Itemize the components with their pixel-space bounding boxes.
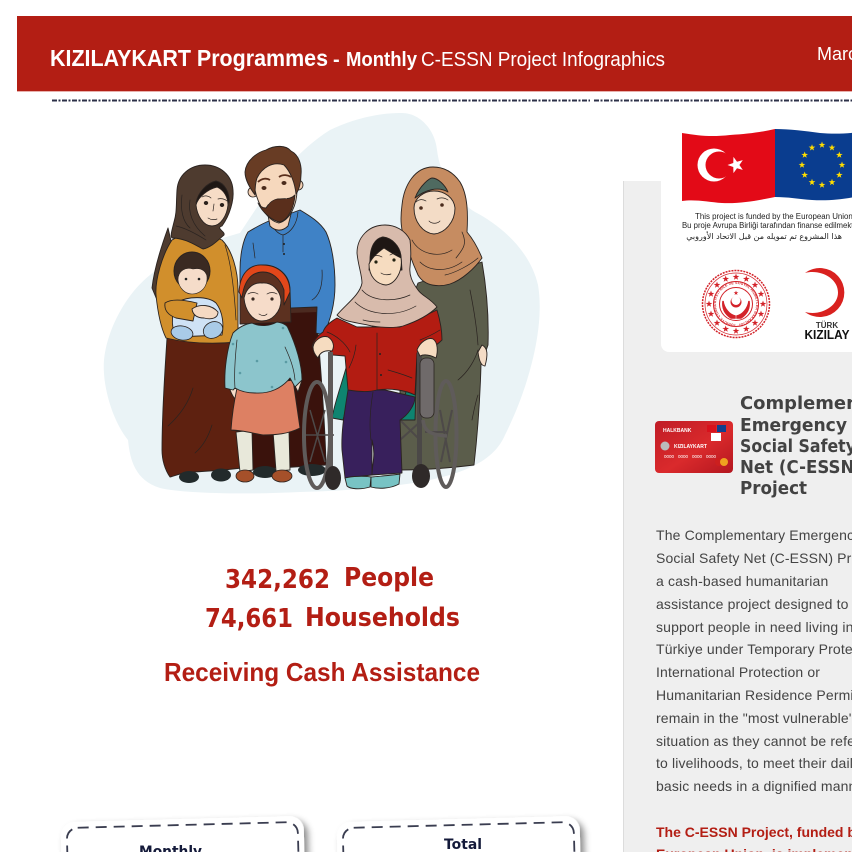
- header title: C-ESSN Project Infographics: [421, 49, 665, 71]
- background blob: [104, 113, 540, 493]
- panel heading: [740, 393, 852, 499]
- project description text: International Protection or: [656, 664, 820, 680]
- illustration: family: [104, 113, 540, 493]
- project description text: remain in the "most vulnerable": [656, 710, 852, 726]
- header title: Monthly: [346, 49, 418, 71]
- stat: people: People: [344, 563, 434, 593]
- header bar: [17, 16, 852, 92]
- logo: Turkish Red Crescent: [804, 268, 850, 342]
- funding note: [656, 824, 852, 852]
- stat: households: 74,661: [205, 604, 293, 634]
- person: older woman: [400, 167, 488, 470]
- icon: Kizilaykart card: 0000: [706, 454, 717, 459]
- panel heading: Project: [740, 478, 807, 499]
- wheelchair back: [304, 353, 456, 488]
- project description text: [656, 527, 852, 794]
- flag: Türkiye: [682, 129, 775, 203]
- wheelchair front: [313, 337, 447, 490]
- dashed divider: [52, 100, 852, 102]
- icon: Kizilaykart card: HALKBANK: [663, 428, 692, 434]
- stat: people: 342,262: [225, 565, 330, 595]
- stat: households: Households: [305, 603, 460, 633]
- header title: KIZILAYKART Programmes: [50, 45, 328, 71]
- card: total: [337, 816, 583, 852]
- icon: Kizilaykart card: KIZILAYKART: [674, 444, 707, 450]
- person: woman in wheelchair: [312, 225, 447, 490]
- flag: European Union: [775, 129, 852, 200]
- icon: Kizilaykart card: [655, 421, 733, 473]
- baby: [165, 252, 225, 342]
- funding statement: هذا المشروع تم تمويله من قبل الاتحاد الأوروبي: [686, 231, 842, 241]
- stat: people and households: [205, 563, 460, 634]
- person: man: [240, 146, 335, 478]
- icon: Kizilaykart card: 0000: [678, 454, 689, 459]
- subheading: receiving cash assistance: Receiving Cash Assistance: [164, 657, 480, 687]
- project description text: a cash-based humanitarian: [656, 573, 828, 589]
- logo: ministry seal: TÜRKİYE CUMHURİYETİ AİLE VE SOSYAL HİZMETLER BAKANLIĞI: [714, 282, 758, 327]
- project description text: assistance project designed to: [656, 596, 849, 612]
- panel: project description: [623, 129, 852, 852]
- logo: Turkish Red Crescent: TÜRK: [816, 321, 838, 330]
- logo: ministry seal: [702, 270, 770, 338]
- project description text: support people in need living in: [656, 619, 852, 635]
- person: woman with baby: [152, 165, 242, 483]
- panel heading: Emergency: [740, 415, 847, 436]
- person: girl: [225, 265, 302, 482]
- icon: Kizilaykart card: 0000: [664, 454, 675, 459]
- funding statement: [682, 212, 852, 241]
- card: monthly: [61, 816, 307, 852]
- header title: -: [333, 49, 340, 71]
- icon: Kizilaykart card: 0000: [692, 454, 703, 459]
- panel: funding logos: [661, 129, 852, 352]
